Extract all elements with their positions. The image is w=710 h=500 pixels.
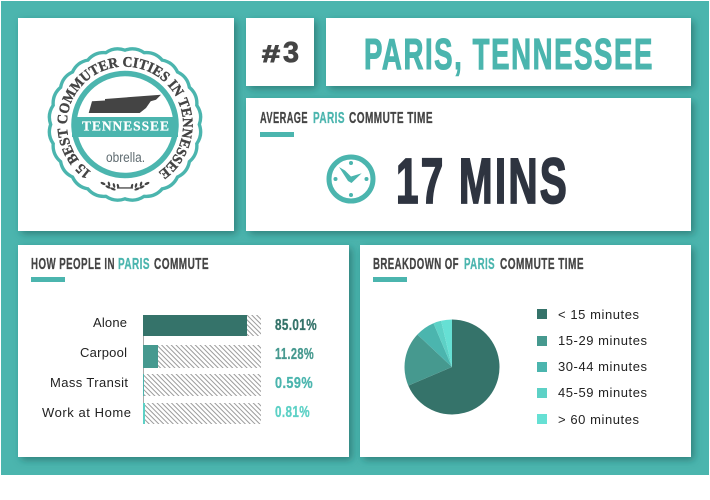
rank number: 3 xyxy=(283,37,299,69)
panel: title xyxy=(326,18,691,86)
big number: 17 MINS xyxy=(396,145,569,217)
badge state name: TENNESSEE xyxy=(82,118,169,134)
bar chart: 85.01% xyxy=(275,317,317,334)
legend xyxy=(537,307,648,427)
badge band xyxy=(72,117,178,137)
heading: PARIS xyxy=(118,256,150,273)
heading underline xyxy=(373,277,407,282)
rank number xyxy=(262,37,299,69)
panel: rank xyxy=(246,18,314,86)
panel: average commute time xyxy=(246,98,691,231)
bar chart: 0.81% xyxy=(275,404,310,421)
curved badge text: 15 BEST COMMUTER CITIES IN TENNESSEE xyxy=(57,56,193,180)
bar chart: Alone xyxy=(93,315,127,330)
panel: badge xyxy=(18,18,240,238)
inner ring xyxy=(74,74,176,176)
bar chart: Work at Home xyxy=(42,405,131,420)
scalloped badge ring xyxy=(49,49,201,200)
bar chart: Mass Transit xyxy=(50,375,128,390)
heading: AVERAGE xyxy=(260,110,308,127)
bar chart xyxy=(42,315,317,424)
panel: breakdown of commute time xyxy=(360,245,691,457)
icon: Tennessee state xyxy=(89,95,161,113)
heading: BREAKDOWN OF xyxy=(373,256,459,273)
legend: 30-44 minutes xyxy=(558,359,648,374)
pie chart xyxy=(405,320,500,414)
heading: COMMUTE TIME xyxy=(500,256,584,273)
heading xyxy=(260,110,433,127)
icon: clock xyxy=(329,157,373,201)
heading underline xyxy=(260,132,294,137)
rank number: # xyxy=(262,41,280,68)
legend: < 15 minutes xyxy=(558,307,640,322)
heading: PARIS xyxy=(464,256,495,273)
heading underline xyxy=(31,277,65,282)
logo text: obrella. xyxy=(106,150,145,165)
panel: how people commute xyxy=(18,245,349,457)
bar chart: 0.59% xyxy=(275,375,313,392)
legend: > 60 minutes xyxy=(558,412,640,427)
heading xyxy=(373,256,584,273)
heading: COMMUTE TIME xyxy=(349,110,433,127)
heading: PARIS xyxy=(313,110,345,127)
bar chart: 11.28% xyxy=(275,346,314,363)
heading: COMMUTE xyxy=(154,256,209,273)
heading: HOW PEOPLE IN xyxy=(31,256,115,273)
legend: 45-59 minutes xyxy=(558,385,648,400)
bar chart: Carpool xyxy=(80,345,127,360)
legend: 15-29 minutes xyxy=(558,333,648,348)
icon: laurels xyxy=(100,181,150,191)
